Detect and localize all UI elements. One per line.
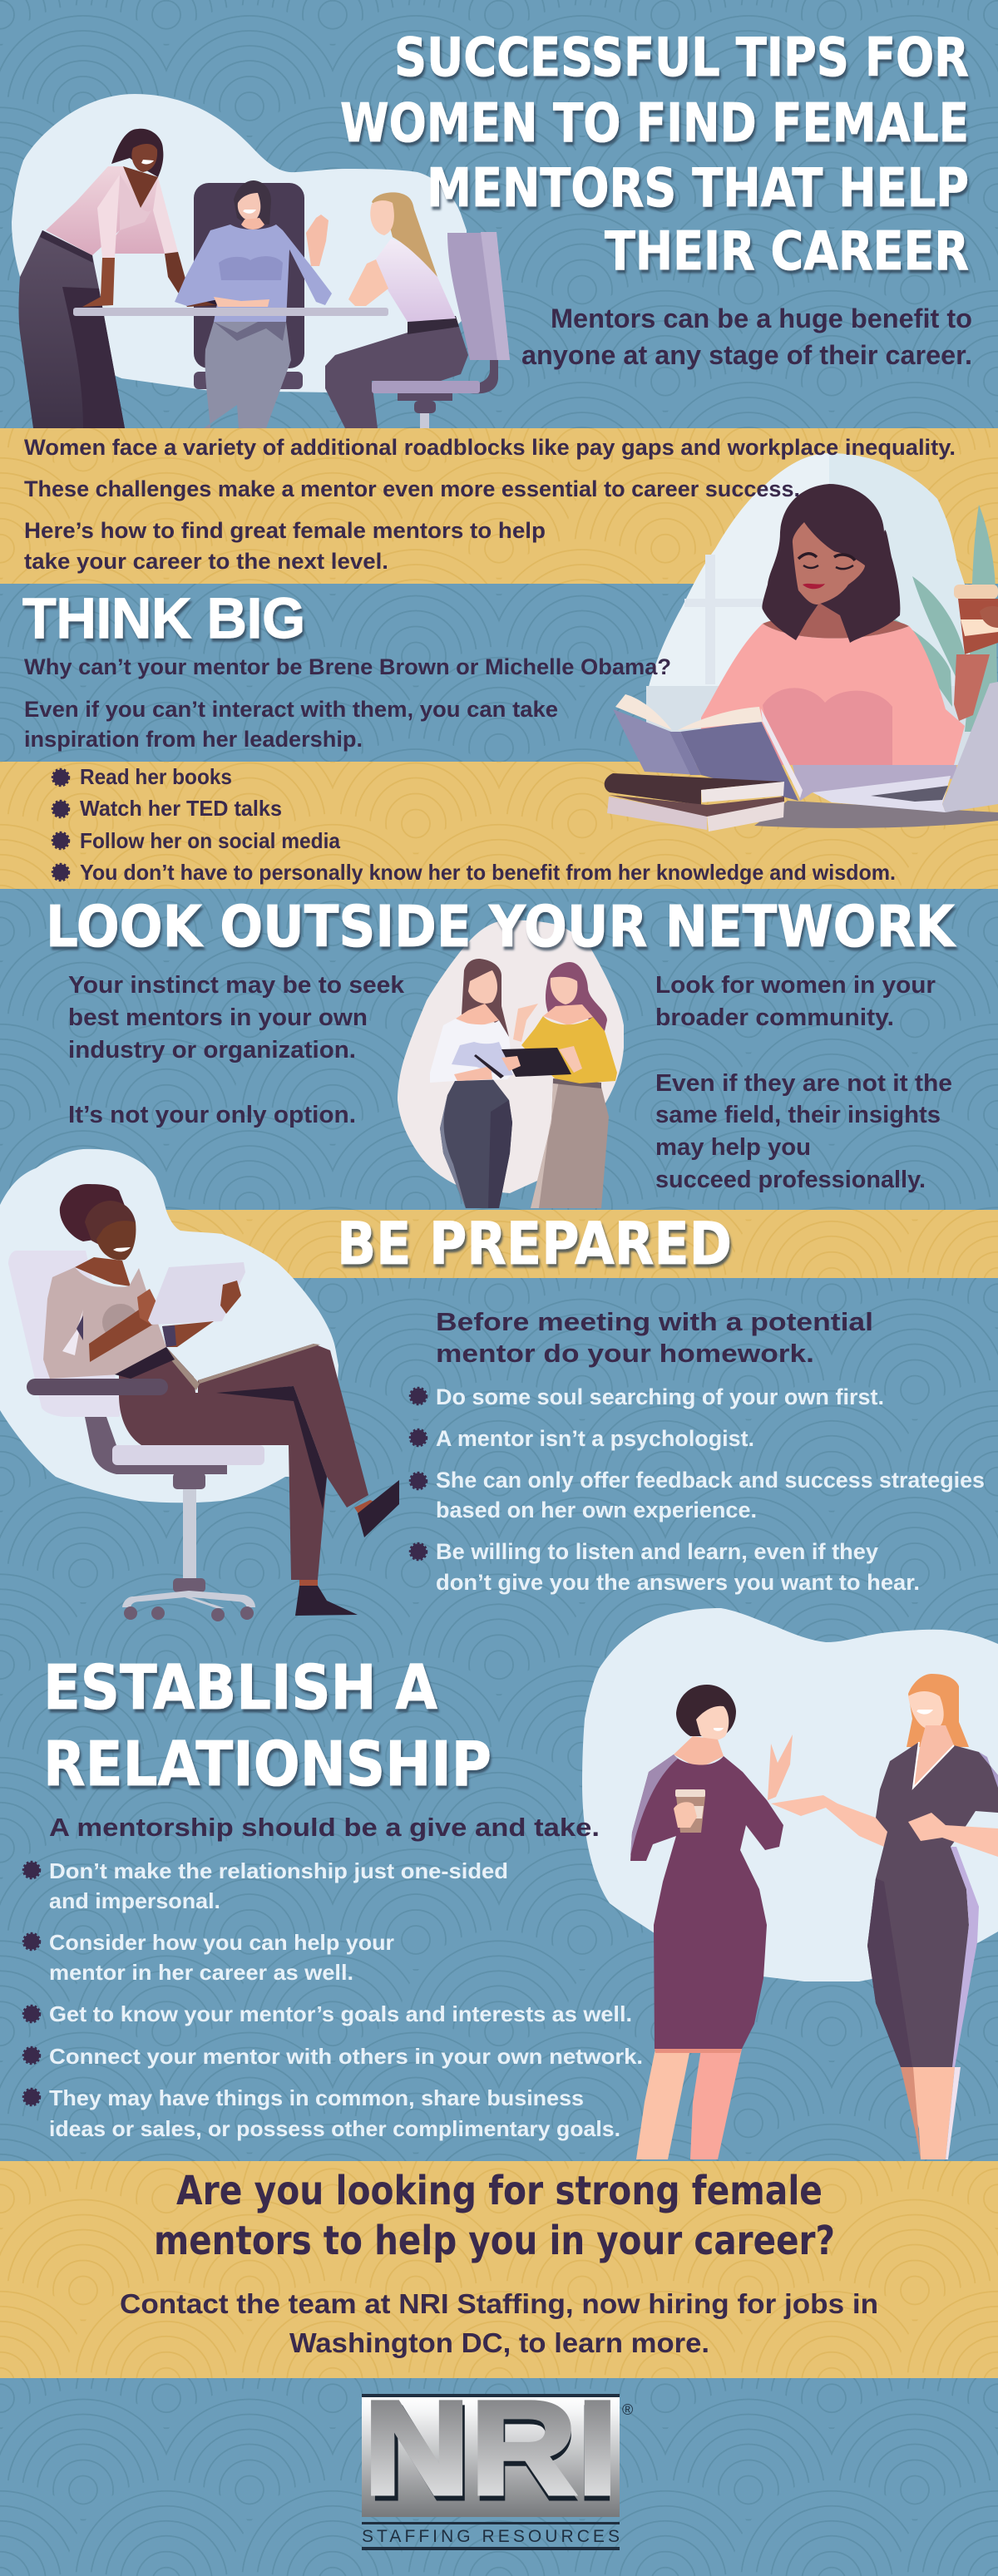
heading: establish a relationship: ESTABLISH A [43,1652,437,1724]
think big bullet list: Watch her TED talks [80,796,282,821]
network right text: same field, their insights [655,1102,941,1128]
intro text: take your career to the next level. [24,549,388,574]
subtitle [521,303,972,370]
logo: NRI Staffing Resources: NRI [368,2378,617,2527]
shirt [701,624,965,765]
open book [613,709,699,775]
be prepared bullet list: Be willing to listen and learn, even if they [436,1539,878,1564]
panel: be prepared band [0,1210,998,1278]
illustration: two women talking [582,1608,998,2159]
plant [887,505,998,765]
illustration: two women with tablet [398,920,624,1208]
relationship bullet list: ideas or sales, or possess other complimentary goals. [49,2116,620,2141]
be prepared bullet list [411,1384,985,1595]
relationship lead text: A mentorship should be a give and take. [49,1813,600,1842]
think big text: inspiration from her leadership. [24,727,363,752]
woman: seated middle [175,180,332,428]
think big bullet list: Follow her on social media [80,828,340,853]
network right text [655,972,952,1193]
be prepared bullet list: She can only offer feedback and success strategies [436,1468,985,1493]
intro text: Here’s how to find great female mentors to help [24,518,546,543]
arm and cup [954,654,990,721]
heading: be prepared: BE PREPARED [337,1210,732,1278]
woman: left [430,959,513,1208]
intro text: Women face a variety of additional roadblocks like pay gaps and workplace inequality. [24,435,956,460]
relationship bullet list: They may have things in common, share business [49,2085,584,2110]
neck [811,582,865,635]
relationship bullet list: and impersonal. [49,1888,220,1913]
call to action heading [154,2168,835,2264]
relationship bullet list: mentor in her career as well. [49,1960,353,1985]
think big text: Even if you can’t interact with them, you can take [24,697,558,722]
logo: NRI Staffing Resources: STAFFING RESOURCES [362,2527,620,2546]
think big text [24,654,671,752]
subtitle: Mentors can be a huge benefit to [551,303,972,333]
chair: right [372,232,510,428]
logo: NRI Staffing Resources: NRI [363,2373,618,2522]
armrest [27,1379,168,1395]
woman: left [630,1685,793,2159]
heading: establish a relationship: RELATIONSHIP [43,1729,492,1800]
network right text: broader community. [655,1004,894,1031]
intro text: These challenges make a mentor even more essential to career success. [24,476,800,501]
network right text: may help you [655,1134,811,1161]
network left text: industry or organization. [68,1037,356,1063]
illustration: woman reading with coffee [605,453,998,832]
table [793,765,956,801]
network left text: It’s not your only option. [68,1102,356,1128]
call to action text: Contact the team at NRI Staffing, now hiring for jobs in [120,2288,878,2319]
be prepared bullet list: based on her own experience. [436,1498,757,1522]
woman: right [501,962,617,1208]
panel: think big list band [0,762,998,889]
heading: think big: THINK BIG [22,586,305,650]
chair: middle [194,183,304,397]
network left text: best mentors in your own [68,1004,368,1031]
be prepared lead text: Before meeting with a potential [436,1307,873,1336]
think big bullet list: Read her books [80,764,232,789]
heading: establish a relationship [43,1652,492,1800]
call to action heading: mentors to help you in your career? [154,2218,835,2264]
illustration: three women at a desk [12,94,510,428]
hair [762,484,900,643]
be prepared lead text [436,1307,873,1368]
woman: standing [18,129,217,428]
call to action text [120,2288,878,2358]
woman: seated right [325,192,468,428]
relationship bullet list: Consider how you can help your [49,1930,394,1955]
laptop [813,776,951,812]
woman: right [771,1674,998,2159]
think big bullet list: You don’t have to personally know her to benefit from her knowledge and wisdom. [80,860,896,885]
be prepared bullet list: don’t give you the answers you want to hear. [436,1570,920,1595]
face [793,522,865,605]
illustration: woman in chair with tablet [0,1149,399,1621]
be prepared lead text: mentor do your homework. [436,1339,814,1368]
logo: NRI Staffing Resources: ® [622,2401,633,2418]
network right text: Even if they are not it the [655,1070,952,1097]
be prepared bullet list: Do some soul searching of your own first. [436,1384,884,1409]
woman sitting [43,1184,399,1616]
desk [73,308,388,316]
title [340,27,969,283]
relationship bullet list: Connect your mentor with others in your own network. [49,2044,643,2069]
panel: call to action band [0,2161,998,2378]
be prepared bullet list: A mentor isn’t a psychologist. [436,1426,754,1451]
subtitle: anyone at any stage of their career. [521,340,972,370]
office chair [8,1251,264,1621]
panel: intro band [0,428,998,584]
call to action text: Washington DC, to learn more. [289,2327,709,2358]
network left text [68,972,405,1128]
relationship bullet list: Get to know your mentor’s goals and interests as well. [49,2001,632,2026]
relationship bullet list: Don’t make the relationship just one-sided [49,1858,508,1883]
relationship bullet list [23,1858,643,2141]
intro text [24,435,956,574]
call to action heading: Are you looking for strong female [176,2168,823,2214]
think big text: Why can’t your mentor be Brene Brown or Michelle Obama? [24,654,671,679]
book stack [605,773,784,805]
network right text: succeed professionally. [655,1167,926,1193]
network left text: Your instinct may be to seek [68,972,405,999]
think big bullet list [53,764,896,885]
network right text: Look for women in your [655,972,936,999]
